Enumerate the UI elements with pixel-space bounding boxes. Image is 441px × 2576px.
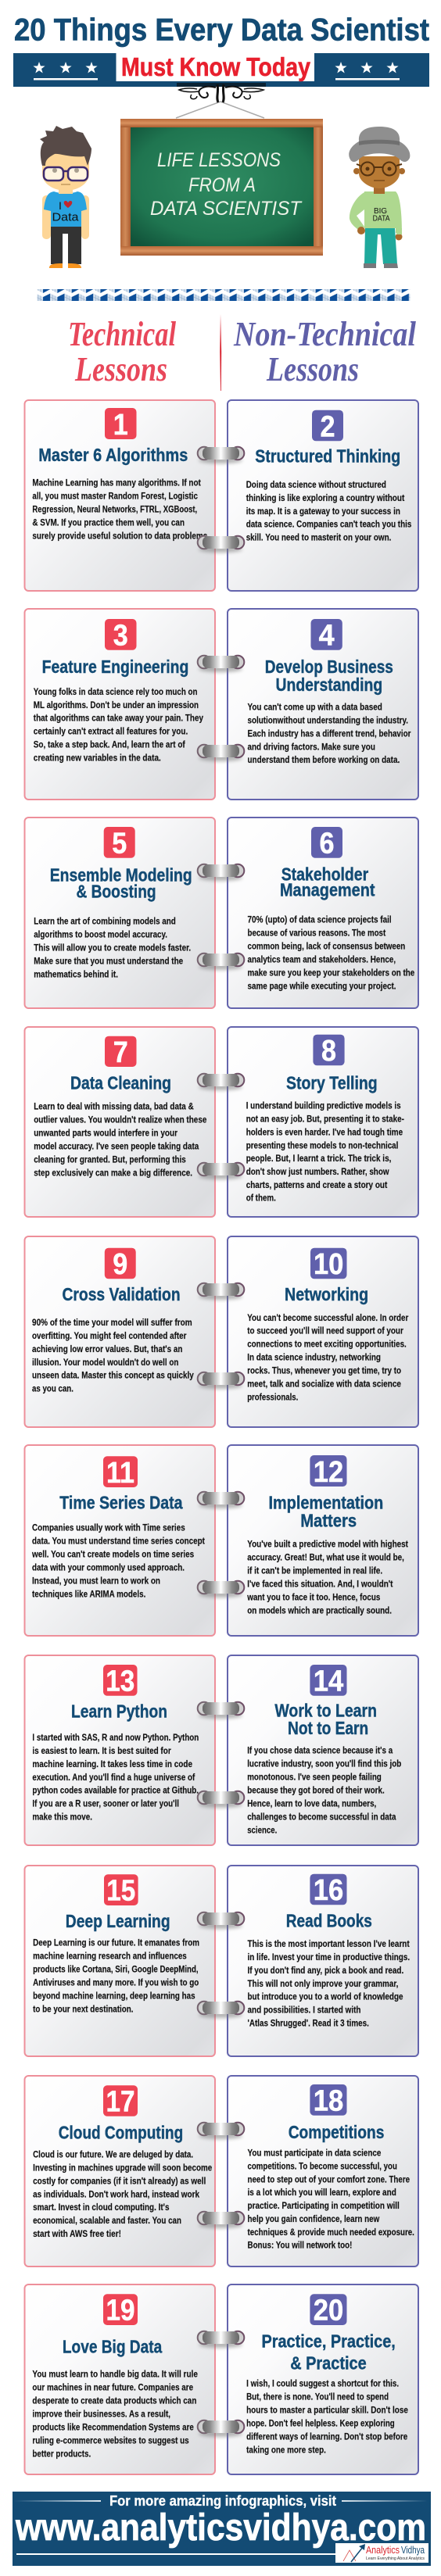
column divider xyxy=(220,314,221,391)
panel: lesson 8: don't show just numbers. Rather, show xyxy=(246,1168,389,1177)
panel: lesson 13: If you are a R user, sooner or later you'll xyxy=(32,1800,179,1809)
panel: lesson 12: I've faced this situation. And, I wouldn't xyxy=(247,1580,393,1589)
panel: lesson 17: Cloud is our future. We are deluged by data. xyxy=(33,2150,193,2159)
panel: lesson 10: connections to meet exciting opportunities. xyxy=(247,1340,407,1350)
footer banner xyxy=(13,2492,431,2566)
panel: lesson 6: 70% (upto) of data science projects fail xyxy=(247,916,392,925)
panel: lesson 11: Time Series Data xyxy=(59,1493,183,1513)
panel: lesson 13: Learn Python xyxy=(71,1701,167,1721)
panel: lesson 6: make sure you keep your stakeholders on the xyxy=(247,968,414,978)
panel: lesson 12: if it can't be implemented in real life. xyxy=(247,1566,382,1576)
panel: lesson 1: Master 6 Algorithms xyxy=(38,445,188,465)
panel: lesson 19: products like Recommendation Systems are xyxy=(32,2423,194,2432)
character: data scientist with hat: DATA xyxy=(373,214,390,224)
panel: lesson 20: different ways of learning. Don't stop before xyxy=(246,2432,407,2442)
chalk lettering xyxy=(150,149,303,220)
panel: lesson 13: I started with SAS, R and now Python. Python xyxy=(32,1733,199,1743)
chalkboard xyxy=(120,119,323,256)
chalk lettering: FROM A xyxy=(188,174,256,196)
panel: lesson 20: 20 xyxy=(314,2295,343,2327)
panel: lesson 3: that algorithms can take away your pain. They xyxy=(34,714,204,724)
binder rings row 3 xyxy=(198,864,244,970)
panel: lesson 7: Learn to deal with missing data, bad data & xyxy=(34,1103,194,1112)
panel: lesson 15: Deep Learning xyxy=(66,1911,170,1931)
heading: non-technical lessons xyxy=(233,315,417,388)
binder rings row 7 xyxy=(198,1702,244,1808)
panel: lesson 1: surely provide useful solution to data problems. xyxy=(32,531,210,541)
panel: lesson 18 xyxy=(228,2076,418,2267)
panel: lesson 15: to be your next destination. xyxy=(33,2005,133,2014)
logo: analytics vidhya: Learn Everything About Analytics xyxy=(366,2556,425,2561)
panel: lesson 2 xyxy=(228,400,418,591)
panel: lesson 7 xyxy=(25,1027,215,1217)
character: data scientist with spiky hair: Data xyxy=(52,211,79,224)
panel: lesson 10: rocks. Thus, whenever you get time, try to xyxy=(247,1367,401,1376)
panel: lesson 2: 2 xyxy=(321,411,335,444)
panel: lesson 8: Story Telling xyxy=(286,1072,378,1093)
panel: lesson 6 xyxy=(228,818,418,1008)
panel: lesson 6: 6 xyxy=(319,827,335,860)
panel: lesson 8: not an easy job. But, presenting it to stake- xyxy=(246,1114,404,1124)
panel: lesson 7: outlier values. You wouldn't realize when these xyxy=(34,1115,206,1125)
panel: lesson 10 xyxy=(228,1236,418,1427)
panel: lesson 19: desperate to create data products which can xyxy=(32,2397,196,2406)
panel: lesson 16: 16 xyxy=(314,1874,343,1907)
panel: lesson 6: analytics team and stakeholders. Hence, xyxy=(247,955,396,964)
panel: lesson 18: Bonus: You will network too! xyxy=(247,2241,352,2251)
panel: lesson 17: Investing in machines upgrade will soon become xyxy=(33,2163,212,2173)
panel: lesson 9: achieving low error values. But, that's an xyxy=(32,1345,183,1354)
panel: lesson 11: data with your commonly used approach. xyxy=(32,1563,185,1572)
panel: lesson 10: to succeed you'll will need support of your xyxy=(247,1327,403,1336)
panel: lesson 15: machine learning research and influences xyxy=(33,1952,187,1962)
panel: lesson 18: competitions. To become successful, you xyxy=(247,2162,397,2171)
panel: lesson 12: You've built a predictive model with highest xyxy=(247,1540,408,1549)
panel: lesson 4: Understanding xyxy=(275,674,382,695)
panel: lesson 20: But, there is none. You'll need to spend xyxy=(246,2393,389,2402)
binder rings row 10 xyxy=(198,2331,244,2437)
panel: lesson 15: Antiviruses and many more. If you wish to go xyxy=(33,1978,199,1987)
panel: lesson 14: Not to Earn xyxy=(288,1718,368,1738)
panel: lesson 3 xyxy=(25,609,215,800)
panel: lesson 8: presenting these models to non-technical xyxy=(246,1141,398,1150)
panel: lesson 4: Each industry has a different trend, behavior xyxy=(247,729,411,739)
heading: technical lessons: Technical xyxy=(68,315,177,353)
binder rings row 6 xyxy=(198,1492,244,1597)
panel: lesson 19: 19 xyxy=(106,2295,134,2327)
panel: lesson 5: mathematics behind it. xyxy=(34,970,118,979)
panel: lesson 16 xyxy=(228,1866,418,2056)
panel: lesson 3: ML algorithms. Don't be under an impression xyxy=(34,701,199,710)
panel: lesson 12: accuracy. Great! But, what use it would be, xyxy=(247,1553,404,1562)
panel: lesson 8: holders is even harder. I've had tough time xyxy=(246,1128,403,1137)
panel: lesson 18: need to step out of your comfort zone. There xyxy=(247,2175,410,2184)
panel: lesson 17: start with AWS free tier! xyxy=(33,2230,121,2239)
character: data scientist with hat xyxy=(349,127,410,268)
panel: lesson 6: Stakeholder xyxy=(281,864,368,885)
panel: lesson 4: solutionwithout understanding the industry. xyxy=(247,716,408,725)
panel: lesson 3: creating new variables in the data. xyxy=(34,754,161,764)
panel: lesson 7: unwanted parts would interfere in your xyxy=(34,1129,177,1138)
panel: lesson 12 xyxy=(228,1445,418,1636)
panel: lesson 20: taking one more step. xyxy=(246,2445,326,2455)
panel: lesson 8: I understand building predictive models is xyxy=(246,1101,401,1111)
banner: must know today: Must Know Today xyxy=(121,52,311,81)
panel: lesson 7: step exclusively can make a big difference. xyxy=(34,1168,192,1178)
panel: lesson 11: techniques like ARIMA models. xyxy=(32,1590,145,1599)
binder rings row 5 xyxy=(198,1283,244,1389)
panel: lesson 20: Practice, Practice, xyxy=(261,2331,396,2351)
panel: lesson 5: algorithms to boost model accuracy. xyxy=(34,931,167,940)
panel: lesson 9: illusion. Your model wouldn't do well on xyxy=(32,1358,178,1368)
panel: lesson 17: 17 xyxy=(106,2085,134,2118)
panel: lesson 10: 10 xyxy=(314,1248,343,1281)
panel: lesson 17 xyxy=(25,2076,215,2267)
panel: lesson 4: You can't come up with a data based xyxy=(247,703,382,712)
logo: analytics vidhya: Analytics xyxy=(366,2545,400,2556)
panel: lesson 11: Companies usually work with Time series xyxy=(32,1524,185,1533)
panel: lesson 13 xyxy=(25,1655,215,1845)
panel: lesson 12: want you to face it too. Hence, focus xyxy=(246,1593,380,1602)
panel: lesson 7: 7 xyxy=(113,1036,128,1069)
panel: lesson 13: python codes available for practice at Github. xyxy=(32,1787,199,1796)
panel: lesson 20: hope. Don't feel helpless. Keep exploring xyxy=(246,2419,395,2428)
panel: lesson 8: of them. xyxy=(246,1194,276,1204)
footer banner: For more amazing infographics, visit xyxy=(109,2493,336,2509)
panel: lesson 18: You must participate in data science xyxy=(247,2148,381,2158)
panel: lesson 11: data. You must understand time series concept xyxy=(32,1537,205,1547)
panel: lesson 2: skill. You need to masterit on your own. xyxy=(246,534,391,543)
ornament and hanging ropes xyxy=(176,84,264,118)
panel: lesson 3: Feature Engineering xyxy=(42,657,188,677)
panel: lesson 18: is a lot which you will learn, explore and xyxy=(247,2188,396,2198)
panel: lesson 14: 14 xyxy=(314,1665,343,1698)
panel: lesson 9: overfitting. You might feel contended after xyxy=(32,1332,187,1341)
panel: lesson 16: in life. Invest your time in productive things. xyxy=(247,1953,410,1962)
panel: lesson 16: Read Books xyxy=(286,1910,372,1930)
panel: lesson 18: 18 xyxy=(314,2085,343,2118)
panel: lesson 10: Networking xyxy=(285,1284,368,1304)
panel: lesson 6: same page while executing your project. xyxy=(247,982,396,991)
panel: lesson 4: 4 xyxy=(319,619,335,652)
panel: lesson 12: 12 xyxy=(314,1456,343,1489)
panel: lesson 5: & Boosting xyxy=(77,881,156,901)
panel: lesson 6: because of various reasons. The most xyxy=(247,929,385,939)
panel: lesson 16: 'Atlas Shrugged'. Read it 3 times. xyxy=(247,2019,369,2028)
panel: lesson 9: Cross Validation xyxy=(63,1284,181,1304)
panel: lesson 6: common being, lack of consensus between xyxy=(247,942,405,951)
panel: lesson 2: Doing data science without structured xyxy=(246,481,386,490)
panel: lesson 8: 8 xyxy=(321,1035,336,1068)
panel: lesson 13: is easiest to learn. It is best suited for xyxy=(32,1747,171,1756)
panel: lesson 15 xyxy=(25,1866,215,2056)
panel: lesson 16: and possibilities. I started with xyxy=(247,2006,361,2016)
panel: lesson 20: & Practice xyxy=(290,2353,367,2374)
character: data scientist with spiky hair: I xyxy=(59,199,62,212)
binder rings row 8 xyxy=(198,1912,244,2018)
panel: lesson 19 xyxy=(25,2284,215,2474)
panel: lesson 11: 11 xyxy=(106,1457,134,1490)
panel: lesson 17: Cloud Computing xyxy=(59,2123,183,2143)
panel: lesson 18: practice. Participating in competition will xyxy=(247,2202,400,2211)
panel: lesson 10: meet, talk and socialize with data science xyxy=(247,1379,401,1389)
panel: lesson 1: Regression, Neural Networks, FTRL, XGBoost, xyxy=(32,506,197,515)
panel: lesson 14: challenges to become successful in data xyxy=(247,1812,396,1822)
panel: lesson 12: Implementation xyxy=(269,1493,383,1513)
binder rings row 1 xyxy=(198,447,244,553)
panel: lesson 11 xyxy=(25,1445,215,1636)
chalk lettering: DATA SCIENTIST xyxy=(150,198,303,220)
heading: technical lessons: Lessons xyxy=(74,350,167,388)
panel: lesson 2: Structured Thinking xyxy=(255,446,400,467)
panel: lesson 14 xyxy=(228,1655,418,1845)
panel: lesson 20: I wish, I could suggest a shortcut for this. xyxy=(246,2380,399,2389)
panel: lesson 19: ruling e-commerce websites to suggest us xyxy=(32,2436,189,2445)
panel: lesson 5: This will allow you to create models faster. xyxy=(34,943,191,953)
panel: lesson 19: You must learn to handle big data. It will rule xyxy=(32,2370,198,2380)
panel: lesson 4: Develop Business xyxy=(265,657,393,677)
panel: lesson 16: This is the most important lesson I've learnt xyxy=(247,1940,410,1949)
panel: lesson 4 xyxy=(228,609,418,800)
heading: non-technical lessons: Lessons xyxy=(266,350,359,388)
panel: lesson 19: improve their businesses. As a result, xyxy=(32,2410,170,2419)
panel: lesson 2: data science. Companies can't teach you this xyxy=(246,521,411,530)
panel: lesson 16: but introduce you to a world of knowledge xyxy=(247,1993,403,2002)
binder rings row 4 xyxy=(198,1074,244,1179)
panel: lesson 9: 9 xyxy=(113,1248,127,1281)
panel: lesson 9 xyxy=(25,1236,215,1427)
panel: lesson 18: Competitions xyxy=(289,2122,384,2142)
binder rings row 9 xyxy=(198,2123,244,2228)
panel: lesson 12: Matters xyxy=(300,1510,357,1530)
panel: lesson 15: Deep Learning is our future. It emanates from xyxy=(33,1939,199,1948)
panel: lesson 4: understand them before working on data. xyxy=(247,756,400,765)
panel: lesson 14: Hence, learn to love data, numbers, xyxy=(247,1799,376,1809)
panel: lesson 14: monotonous. I've seen people failing xyxy=(247,1773,382,1783)
panel: lesson 17: economical, scalable and faster. You can xyxy=(33,2216,181,2226)
panel: lesson 15: beyond machine learning, deep learning has xyxy=(33,1991,195,2001)
panel: lesson 1: 1 xyxy=(113,409,128,442)
panel: lesson 3: 3 xyxy=(113,619,128,652)
panel: lesson 13: machine learning. It takes less time in code xyxy=(32,1760,192,1769)
panel: lesson 10: You can't become successful alone. In order xyxy=(247,1314,409,1323)
banner: must know today xyxy=(13,52,429,87)
panel: lesson 8 xyxy=(228,1027,418,1217)
panel: lesson 14: If you chose data science because it's a xyxy=(247,1747,393,1756)
panel: lesson 12: on models which are practically sound. xyxy=(247,1606,392,1615)
character: data scientist with hat: BIG xyxy=(374,207,387,216)
panel: lesson 3: So, take a step back. And, learn the art of xyxy=(34,741,185,750)
panel: lesson 1: Machine Learning has many algorithms. If not xyxy=(32,479,201,488)
panel: lesson 2: its map. It is a gateway to your success in xyxy=(246,507,400,517)
panel: lesson 10: In data science industry, networking xyxy=(247,1354,381,1363)
panel: lesson 11: well. You can't create models on time series xyxy=(31,1551,194,1560)
panel: lesson 13: 13 xyxy=(106,1665,134,1698)
panel: lesson 3: certainly can't extract all features for you. xyxy=(34,728,188,737)
panel: lesson 14: science. xyxy=(247,1826,277,1835)
panel: lesson 8: charts, patterns and create a story out xyxy=(246,1181,387,1190)
panel: lesson 15: 15 xyxy=(106,1875,135,1908)
panel: lesson 6: Management xyxy=(280,880,375,900)
panel: lesson 1: & SVM. If you practice them well, you can xyxy=(32,519,185,528)
panel: lesson 11: Instead, you must learn to work on xyxy=(32,1576,160,1586)
panel: lesson 5 xyxy=(25,818,215,1008)
panel: lesson 19: our machines in near future. Companies are xyxy=(32,2384,193,2393)
logo: analytics vidhya: Vidhya xyxy=(401,2545,425,2556)
heading: technical lessons xyxy=(68,315,177,388)
panel: lesson 9: unseen data. Master this concept as quickly xyxy=(32,1372,194,1381)
panel: lesson 16: This will not only improve your grammar, xyxy=(247,1980,398,1989)
panel: lesson 17: as individuals. Don't work hard, instead work xyxy=(33,2190,200,2199)
panel: lesson 1: all, you must master Random Forest, Logistic xyxy=(32,492,198,502)
panel: lesson 18: help you gain confidence, learn new xyxy=(247,2215,379,2224)
panel: lesson 4: and driving factors. Make sure you xyxy=(247,742,375,752)
panel: lesson 16: If you don't find any, pick a book and read. xyxy=(247,1966,403,1976)
panel: lesson 18: techniques & provide much needed exposure. xyxy=(247,2228,414,2238)
panel: lesson 9: 90% of the time your model will suffer from xyxy=(32,1318,192,1328)
panel: lesson 7: Data Cleaning xyxy=(70,1072,171,1093)
panel: lesson 5: 5 xyxy=(112,827,127,860)
panel: lesson 1 xyxy=(25,400,215,591)
panel: lesson 13: execution. And you'll find a huge universe of xyxy=(32,1773,195,1783)
binder rings row 2 xyxy=(198,656,244,761)
panel: lesson 20: hours to master a particular skill. Don't lose xyxy=(246,2406,408,2415)
panel: lesson 3: Young folks in data science rely too much on xyxy=(34,688,197,697)
character: data scientist with spiky hair xyxy=(40,126,91,268)
panel: lesson 9: as you can. xyxy=(32,1385,74,1394)
panel: lesson 8: people. But, I learnt a trick. The trick is, xyxy=(246,1154,391,1164)
panel: lesson 14: Work to Learn xyxy=(274,1701,377,1721)
panel: lesson 14: lucrative industry, soon you'll find this job xyxy=(247,1760,401,1769)
panel: lesson 15: products like Cortana, Siri, Google DeepMind, xyxy=(33,1966,199,1975)
panel: lesson 5: Ensemble Modeling xyxy=(50,865,192,886)
panel: lesson 7: model accuracy. I've seen people taking data xyxy=(34,1142,199,1151)
panel: lesson 10: professionals. xyxy=(247,1393,298,1402)
heading: non-technical lessons: Non-Technical xyxy=(233,315,417,353)
panel: lesson 14: because they got bored of their work. xyxy=(247,1786,385,1795)
chalk lettering: LIFE LESSONS xyxy=(157,149,281,171)
panel: lesson 20 xyxy=(228,2284,418,2474)
panel: lesson 5: Make sure that you must understand the xyxy=(34,957,183,966)
panel: lesson 13: make this move. xyxy=(32,1813,92,1823)
panel: lesson 7: cleaning for granted. But, performing this xyxy=(34,1155,186,1165)
panel: lesson 19: Love Big Data xyxy=(63,2337,162,2357)
panel: lesson 2: thinking is like exploring a country without xyxy=(246,494,404,503)
panel: lesson 19: better products. xyxy=(32,2449,91,2459)
panel: lesson 17: smart. Invest in cloud computing. It's xyxy=(33,2203,169,2213)
panel: lesson 5: Learn the art of combining models and xyxy=(34,918,176,927)
panel: lesson 17: costly for companies (if it isn't already) as well xyxy=(33,2177,206,2186)
logo: analytics vidhya xyxy=(335,2543,428,2563)
